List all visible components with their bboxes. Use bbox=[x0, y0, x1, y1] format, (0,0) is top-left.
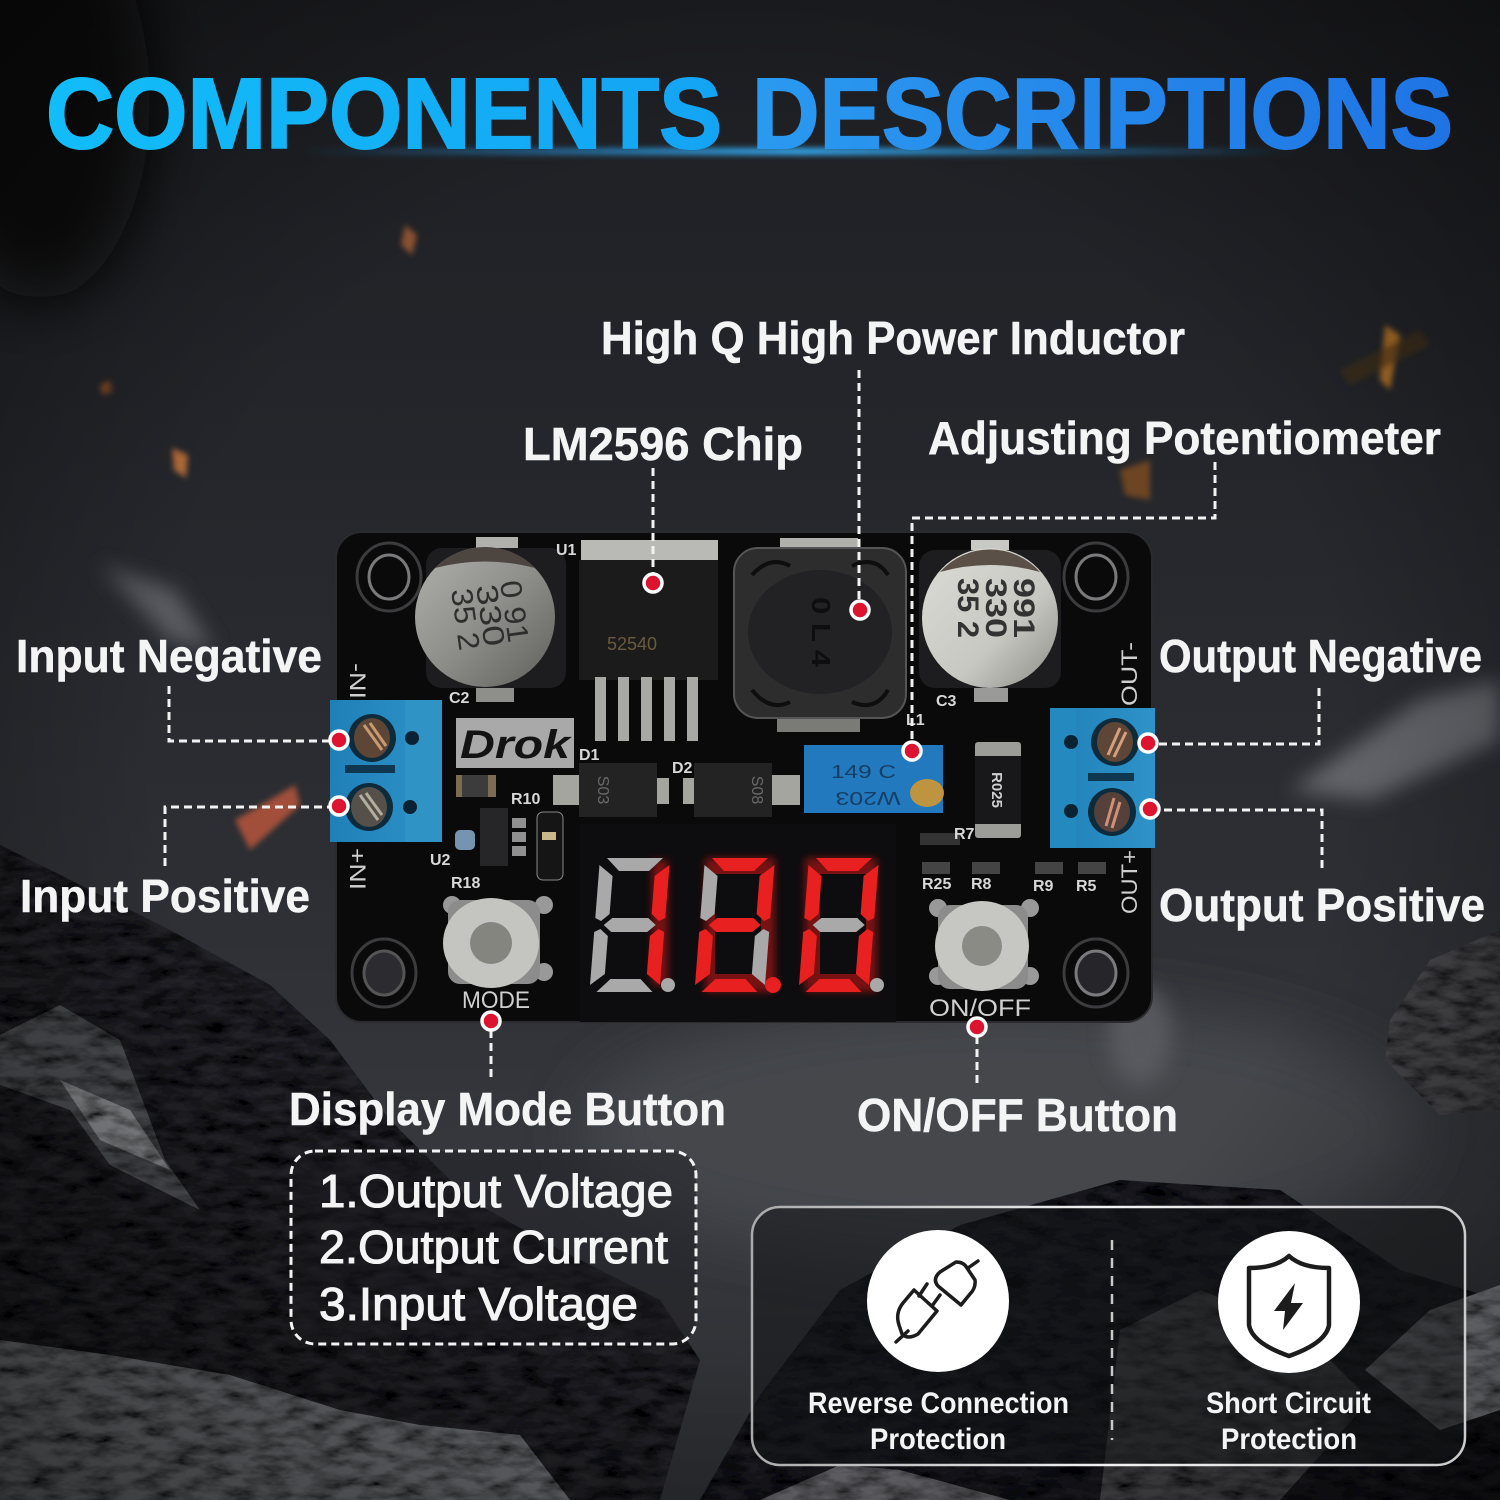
silkscreen labels: C3 bbox=[936, 693, 957, 710]
capacitor C3 bbox=[919, 540, 1061, 702]
mounting holes bbox=[352, 543, 1128, 1007]
label: Adjusting Potentiometer: Adjusting Potentiometer bbox=[928, 412, 1441, 464]
silkscreen labels: +NI bbox=[345, 848, 370, 890]
silkscreen labels: R18 bbox=[451, 875, 480, 892]
sense resistor R025 bbox=[975, 742, 1021, 838]
title: Components Descriptions: COMPONENTS bbox=[46, 58, 722, 170]
display mode list box: 2.Output Current bbox=[319, 1221, 668, 1273]
label: Display Mode Button: Display Mode Button bbox=[289, 1083, 726, 1135]
silkscreen labels: C2 bbox=[449, 690, 470, 707]
input terminal block bbox=[330, 700, 442, 842]
caption: protection: Protection bbox=[870, 1423, 1006, 1456]
adjusting potentiometer: 149 C bbox=[831, 762, 896, 782]
ON/OFF button bbox=[929, 899, 1039, 991]
Drok logo bbox=[456, 718, 574, 768]
silkscreen labels: U1 bbox=[556, 542, 577, 559]
protection panel bbox=[752, 1207, 1465, 1465]
label: Output Positive: Output Positive bbox=[1159, 879, 1485, 931]
icon: unplugged connector bbox=[867, 1230, 1009, 1372]
diode D2 bbox=[683, 763, 800, 817]
circuit board bbox=[330, 532, 1155, 1022]
Drok logo: Drok bbox=[460, 723, 572, 767]
capacitor C3: 991 bbox=[1007, 578, 1040, 638]
silkscreen labels: R10 bbox=[511, 791, 540, 808]
digit glow bbox=[652, 858, 877, 992]
diode D2: S08 bbox=[748, 776, 765, 804]
output terminal block bbox=[1050, 708, 1155, 848]
silkscreen labels: ON/OFF bbox=[929, 995, 1031, 1022]
capacitor C2: 0 91 bbox=[493, 578, 534, 644]
label: Input Negative: Input Negative bbox=[16, 630, 322, 682]
label: Input Positive: Input Positive bbox=[20, 870, 310, 922]
display mode list box bbox=[291, 1151, 696, 1344]
MODE button bbox=[443, 896, 553, 988]
LM2596 chip bbox=[579, 540, 718, 741]
LM2596 chip: 52540 bbox=[607, 634, 657, 654]
display mode list box: 1.Output Voltage bbox=[319, 1165, 673, 1217]
caption: short circuit protection: Short Circuit bbox=[1206, 1387, 1371, 1420]
silkscreen labels: L1 bbox=[906, 712, 925, 729]
digit 1 bbox=[589, 858, 670, 992]
inductor: 0 L 4 bbox=[806, 597, 836, 668]
icon: shield with lightning bolt bbox=[1218, 1231, 1360, 1373]
silkscreen labels: R7 bbox=[954, 826, 975, 843]
diode D1 bbox=[553, 763, 669, 817]
adjusting potentiometer bbox=[804, 745, 944, 813]
silkscreen labels: R25 bbox=[922, 876, 951, 893]
silkscreen labels: D1 bbox=[579, 747, 600, 764]
digit 0 bbox=[798, 858, 879, 992]
inductor bbox=[734, 538, 906, 732]
silkscreen labels bbox=[345, 542, 1142, 1022]
red marker dots bbox=[330, 574, 1159, 1036]
diode D1: S03 bbox=[594, 776, 611, 804]
silkscreen labels: MODE bbox=[462, 987, 530, 1014]
small SMD parts bbox=[455, 775, 1106, 880]
silkscreen labels: -NI bbox=[345, 663, 370, 699]
title: Components Descriptions: DESCRIPTIONS bbox=[752, 58, 1453, 170]
silkscreen labels: R9 bbox=[1033, 878, 1054, 895]
divider bbox=[1111, 1240, 1113, 1440]
silkscreen labels: OUT- bbox=[1117, 642, 1142, 706]
caption: protection: Protection bbox=[1221, 1423, 1357, 1456]
adjusting potentiometer: W203 bbox=[836, 788, 900, 808]
digit 2 bbox=[694, 858, 775, 992]
silkscreen labels: R5 bbox=[1076, 878, 1097, 895]
silkscreen labels: D2 bbox=[672, 760, 693, 777]
display mode list box: 3.Input Voltage bbox=[319, 1278, 638, 1330]
capacitor C2 bbox=[415, 537, 566, 702]
sense resistor R025: R025 bbox=[988, 772, 1005, 808]
caption: reverse connection protection: Reverse Connection bbox=[808, 1387, 1069, 1420]
label: High Q High Power Inductor: High Q High Power Inductor bbox=[601, 312, 1185, 364]
label: ON/OFF Button: ON/OFF Button bbox=[857, 1089, 1178, 1141]
capacitor C3: 35 2 bbox=[951, 578, 984, 638]
capacitor C3: 330 bbox=[979, 578, 1012, 638]
silkscreen labels: OUT+ bbox=[1117, 850, 1142, 914]
silkscreen labels: R8 bbox=[971, 876, 992, 893]
label: LM2596 Chip: LM2596 Chip bbox=[523, 418, 803, 470]
leader lines bbox=[165, 370, 1322, 1086]
title: Components Descriptions bbox=[46, 58, 1453, 170]
LED display module bbox=[580, 824, 896, 1022]
silkscreen labels: U2 bbox=[430, 852, 451, 869]
capacitor C2: 35 2 bbox=[444, 586, 485, 652]
capacitor C2: 330 bbox=[469, 582, 510, 648]
